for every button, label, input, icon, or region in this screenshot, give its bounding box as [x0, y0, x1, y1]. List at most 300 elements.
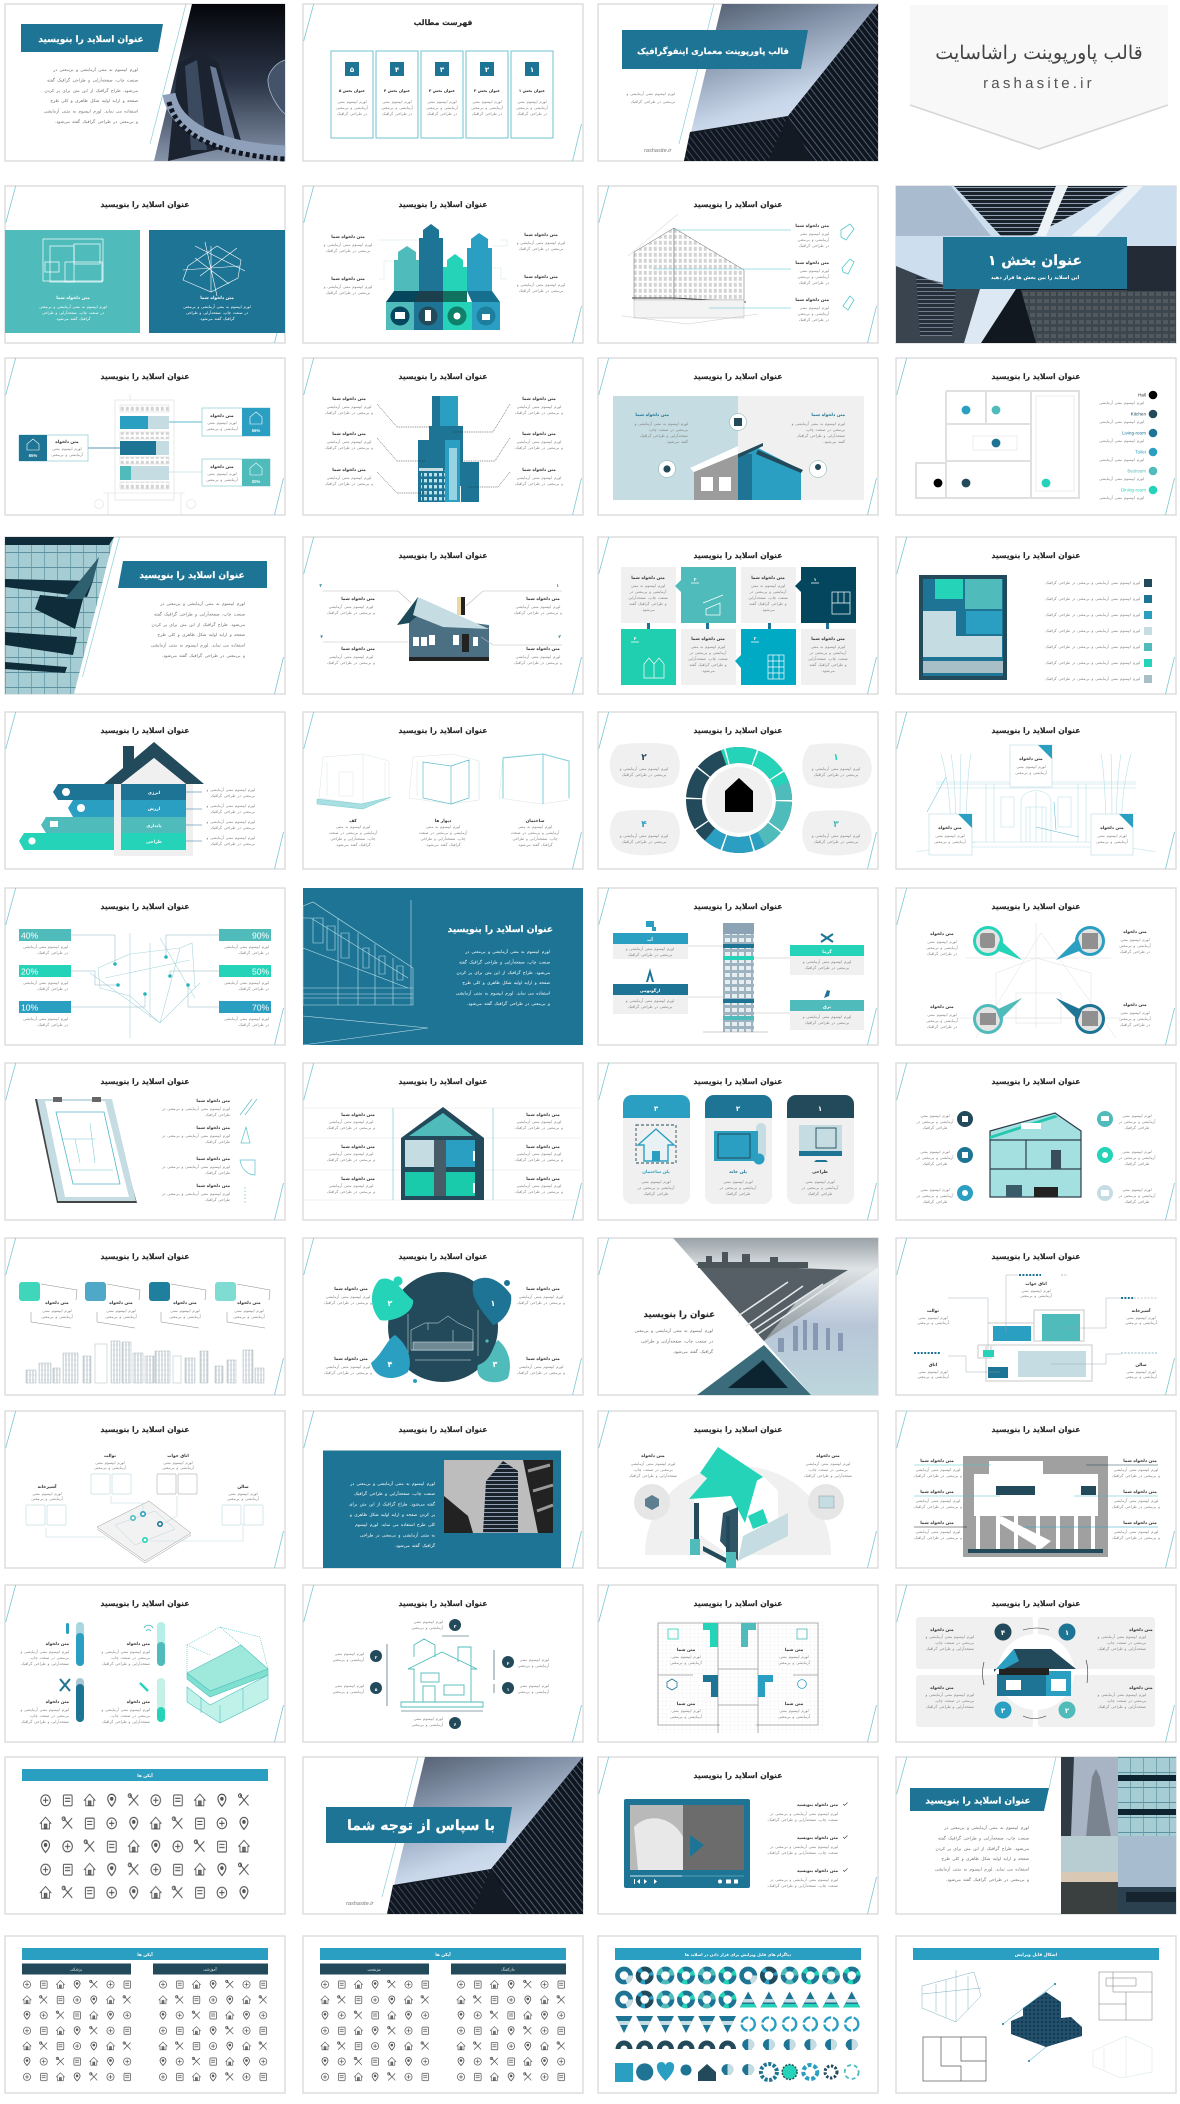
callout texts: متن دلخواه شما: [795, 297, 829, 303]
coloured doors: [703, 1623, 773, 1697]
side icons: [957, 1111, 1113, 1201]
callouts: بی‌معنی در طراحی گرافیک: [326, 290, 370, 295]
card 2: پلن خانه: [729, 1169, 747, 1175]
body text: لورم ایپسوم به متنی آزمایشی و بی‌معنی: [635, 1327, 713, 1334]
labels: متن دلخواه شما: [1123, 1520, 1157, 1526]
labels: اتاق خواب: [167, 1453, 189, 1459]
labels: در طراحی گرافیک: [1120, 1022, 1150, 1027]
labels: آزمایشی و بی‌معنی: [926, 1018, 959, 1023]
house shape: [104, 742, 204, 856]
title: عنوان اسلاید را بنویسید: [694, 1771, 782, 1780]
labels: صفحه‌آرایی و طراحی گرافیک: [629, 1473, 677, 1478]
labels: لورم ایپسوم متنی آزمایشی: [916, 1529, 960, 1534]
title: عنوان اسلاید را بنویسید: [101, 1425, 189, 1434]
callout texts: آزمایشی و بی‌معنی: [797, 274, 830, 279]
icons bar: آیکن ها: [435, 1951, 451, 1958]
labels: و بی‌معنی در طراحی گرافیک: [1112, 1473, 1160, 1478]
blue panel: [323, 1450, 561, 1568]
body text: و بی‌معنی در طراحی گرافیک گفته می‌شود.: [946, 1877, 1029, 1883]
subtitle: لورم ایپسوم متنی آزمایشی و: [626, 91, 675, 96]
leader lines: [323, 591, 562, 645]
title: عنوان اسلاید را بنویسید: [399, 1599, 487, 1608]
cover title banner: قالب پاورپوینت معماری اینفوگرافیک: [637, 46, 789, 57]
blobs: [371, 1276, 511, 1383]
card labels: متن دلخواه: [45, 1300, 69, 1306]
labels: لورم ایپسوم متنی: [32, 1491, 62, 1496]
slide: classical facade: [896, 712, 1176, 869]
contents labels: ۳: [440, 66, 445, 74]
labels: [914, 1458, 1160, 1540]
title: عنوان اسلاید را بنویسید: [694, 372, 782, 381]
title: عنوان اسلاید را بنویسید: [992, 1425, 1080, 1434]
card texts: و طراحی گرافیک گفته: [749, 601, 787, 606]
slide: isometric map: [5, 1411, 285, 1568]
center: [706, 767, 772, 833]
title: عنوان اسلاید را بنویسید: [992, 902, 1080, 911]
slide: cover: [598, 4, 878, 161]
number circles: ۱: [1065, 1629, 1069, 1637]
legend text: لورم ایپسوم متنی آزمایشی و بی‌معنی در طراحی گرافیک: [1045, 580, 1140, 585]
title: عنوان را بنویسید: [644, 1310, 715, 1320]
labels: لورم ایپسوم متنی: [228, 1491, 258, 1496]
labels: و بی‌معنی در طراحی گرافیک: [325, 410, 373, 415]
contents labels: ۱: [530, 66, 534, 74]
callout texts: در طراحی گرافیک: [799, 243, 829, 248]
legend: لورم ایپسوم متنی آزمایشی: [1099, 457, 1144, 462]
list items: متن دلخواه بنویسید: [797, 1868, 838, 1874]
wireframe: [90, 933, 200, 1038]
blob texts: ۱: [833, 753, 839, 763]
card 2: آزمایشی و بی‌معنی: [934, 839, 967, 844]
slide: cutaway house: [896, 1063, 1176, 1220]
labels: لورم ایپسوم متنی آزمایشی: [1114, 1467, 1158, 1472]
labels: [629, 1453, 852, 1478]
blob numbers: ۲: [388, 1299, 393, 1308]
side labels: لورم ایپسوم متنی آزمایشی: [517, 1183, 561, 1188]
slide: building percentages: [5, 358, 285, 515]
callout texts: آزمایشی و بی‌معنی: [797, 237, 830, 242]
card 1: متن دلخواه: [1019, 756, 1043, 762]
photo: sky and glass building: [387, 1757, 583, 1914]
card 2: [929, 814, 972, 855]
title: عنوان اسلاید را بنویسید: [992, 372, 1080, 381]
card labels: متن دلخواه: [173, 1300, 197, 1306]
labels: و بی‌معنی در طراحی گرافیک: [517, 1370, 565, 1375]
labels: لورم ایپسوم متنی آزمایشی: [516, 654, 560, 659]
section house: [401, 1107, 484, 1200]
right stat bars: لورم ایپسوم متنی آزمایشی: [224, 1016, 269, 1021]
photo: skyline and sea: [764, 1268, 878, 1395]
blob texts: ۳: [833, 820, 839, 830]
contents labels: عنوان بخش ۳: [429, 88, 455, 93]
icon grid right: [155, 1977, 272, 2085]
title: عنوان اسلاید را بنویسید: [694, 200, 782, 209]
side labels: و بی‌معنی در طراحی گرافیک: [327, 1125, 375, 1130]
tower illustration: [418, 396, 479, 502]
stat box 20%: 20%: [252, 479, 260, 484]
left stat bars: در طراحی گرافیک.: [37, 1022, 68, 1027]
labels: لورم ایپسوم متنی آزمایشی: [326, 1364, 370, 1369]
labels: سالن: [1135, 1362, 1147, 1368]
labels: متن دلخواه شما: [522, 431, 556, 437]
labels: [31, 1453, 260, 1501]
blob texts: لورم ایپسوم متنی آزمایشی و: [811, 833, 860, 838]
layer descriptions: [206, 787, 255, 846]
cutaway: [990, 1113, 1081, 1197]
card 3: لورم ایپسوم متنی: [641, 1179, 671, 1184]
labels: متن دلخواه شما: [332, 431, 366, 437]
stat box 20%: متن دلخواه: [210, 464, 234, 470]
labels: آزمایشی و بی‌معنی: [31, 1496, 64, 1501]
contents labels: لورم ایپسوم متنی: [472, 99, 502, 104]
items: [161, 1098, 230, 1202]
card 3: متن دلخواه: [1100, 825, 1124, 831]
callouts: لورم ایپسوم متنی آزمایشی و: [516, 282, 565, 287]
labels: لورم ایپسوم به متنی: [426, 824, 460, 829]
material circles: [974, 928, 1104, 1032]
building bars: [120, 416, 169, 480]
legend: Living-room: [1122, 430, 1146, 436]
labels: در طراحی گرافیک: [927, 1024, 957, 1029]
card 3: [1091, 814, 1133, 855]
slide: diagrams: [598, 1936, 878, 2093]
card labels: آزمایشی و بی‌معنی: [169, 1314, 202, 1319]
labels: متن دلخواه شما: [522, 467, 556, 473]
room labels: متن شما: [677, 1701, 696, 1707]
card texts: آزمایشی و بی‌معنی در: [629, 589, 667, 594]
labels: گرافیک گفته می‌شود.: [335, 842, 371, 847]
left stat bars: در طراحی گرافیک.: [37, 950, 68, 955]
step circles: [370, 1619, 514, 1729]
card 3: آزمایشی و بی‌معنی در: [637, 1185, 675, 1190]
contents labels: لورم ایپسوم متنی: [427, 99, 457, 104]
wire box: frame: [499, 754, 569, 804]
list items: [767, 1802, 838, 1888]
photo: teal glass facade: [5, 537, 114, 694]
labels: آزمایشی و بی‌معنی در صنعت: [329, 830, 378, 835]
slide: glass photo with text: [5, 537, 285, 694]
card 2: ۲: [736, 1105, 741, 1113]
legend: لورم ایپسوم متنی آزمایشی: [1099, 476, 1144, 481]
contents labels: ۲: [485, 66, 490, 74]
body text: [456, 948, 550, 1007]
right text: گفته می‌شود.: [823, 439, 845, 444]
tower chart: [386, 224, 500, 330]
left stat bars: 20%: [21, 966, 39, 976]
labels: توالت: [927, 1308, 939, 1314]
layer panel: انرژی: [148, 790, 161, 796]
card texts: و طراحی گرافیک گفته: [629, 601, 667, 606]
body text: استفاده می نماید. لورم ایپسوم به متنی آزمایشی: [935, 1866, 1029, 1872]
labels: و بی‌معنی در طراحی گرافیک: [324, 1370, 372, 1375]
panel: teal floorplan: در صنعت چاپ، صفحه‌آرایی و طراحی: [42, 310, 104, 315]
labels: صفحه‌آرایی و طراحی گرافیک: [804, 1473, 852, 1478]
tool icons: [841, 224, 854, 310]
labels: آزمایشی و بی‌معنی: [1125, 1320, 1158, 1325]
side labels: متن دلخواه شما: [526, 1112, 560, 1118]
card water: بی‌معنی در طراحی گرافیک: [628, 952, 672, 957]
body text: [935, 1824, 1029, 1883]
thanks banner: با سپاس از توجه شما: [347, 1818, 495, 1834]
labels: لورم ایپسوم متنی آزمایشی: [329, 654, 373, 659]
labels: متن دلخواه شما: [332, 467, 366, 473]
gray cards: [621, 567, 856, 685]
callouts: بی‌معنی در طراحی گرافیک: [519, 288, 563, 293]
body text: گرافیک گفته می‌شود.: [395, 1543, 436, 1549]
panel: teal floorplan: [5, 230, 140, 333]
body text: لورم ایپسوم به متنی آزمایشی و بی‌معنی در: [349, 1480, 435, 1487]
card heat: لورم ایپسوم متنی آزمایشی و: [802, 959, 851, 964]
labels: متن دلخواه شما: [1123, 1458, 1157, 1464]
contents labels: در طراحی گرافیک: [427, 111, 457, 116]
labels: لورم ایپسوم متنی: [918, 1315, 948, 1320]
labels: لورم ایپسوم متنی آزمایشی: [517, 475, 561, 480]
contents labels: لورم ایپسوم متنی: [382, 99, 412, 104]
slide: blueprint tablet: [5, 1063, 285, 1220]
callouts: [323, 232, 565, 295]
side labels: متن دلخواه شما: [341, 1112, 375, 1118]
legend: لورم ایپسوم متنی آزمایشی: [1099, 400, 1144, 405]
left stat bars: در طراحی گرافیک.: [37, 986, 68, 991]
legend text: لورم ایپسوم متنی آزمایشی و بی‌معنی در طراحی گرافیک: [1045, 596, 1140, 601]
body text: استفاده می نماید. لورم ایپسوم به متنی آزمایشی: [44, 108, 138, 114]
labels: متن دلخواه: [1123, 929, 1147, 935]
plan walls: [978, 1310, 1092, 1381]
title: عنوان اسلاید را بنویسید: [992, 726, 1080, 735]
contents labels: آزمایشی و بی‌معنی: [336, 105, 369, 110]
slide: business and marketing icons: [303, 1936, 583, 2093]
title: عنوان اسلاید را بنویسید: [399, 1077, 487, 1086]
blob texts: [619, 753, 860, 844]
labels: و بی‌معنی در طراحی گرافیک: [514, 660, 562, 665]
card 1: لورم ایپسوم متنی: [1016, 764, 1046, 769]
side texts: [916, 1113, 1156, 1204]
card texts: آزمایشی و بی‌معنی در: [749, 589, 787, 594]
body text: صفحه و ارایه اولیه شکل ظاهری و کلی طرح: [941, 1856, 1029, 1862]
number squares: [345, 62, 539, 76]
floorplan a: [923, 2037, 986, 2081]
labels: و بی‌معنی در طراحی گرافیک: [324, 1300, 372, 1305]
side labels: لورم ایپسوم متنی آزمایشی: [329, 1151, 373, 1156]
labels: لورم ایپسوم متنی آزمایشی: [327, 404, 371, 409]
labels: و بی‌معنی در طراحی گرافیک: [914, 1473, 962, 1478]
gauge labels: [20, 1641, 150, 1724]
labels: متن دلخواه شما: [920, 1489, 954, 1495]
section banner: عنوان بخش ۱: [988, 253, 1082, 269]
left text: صفحه‌آرایی و طراحی گرافیک: [640, 433, 688, 438]
card labels: لورم ایپسوم متنی: [42, 1308, 72, 1313]
card texts: صنعت چاپ، صفحه‌آرایی: [628, 595, 668, 600]
gauge labels: لورم ایپسوم متنی آزمایشی و: [100, 1649, 150, 1654]
right stat bars: 50%: [252, 966, 270, 976]
feature circles: [658, 414, 826, 478]
side texts: طراحی گرافیک: [923, 1125, 947, 1130]
card power: بی‌معنی در طراحی گرافیک: [805, 1020, 849, 1025]
slide: coloured plan: [896, 537, 1176, 694]
labels: لورم ایپسوم متنی آزمایشی: [517, 404, 561, 409]
legend text: [1045, 580, 1140, 681]
card water: [613, 921, 688, 959]
layer descriptions: بی‌معنی در طراحی گرافیک: [211, 841, 255, 846]
room labels: [670, 1647, 811, 1719]
dotted leaders: [377, 404, 510, 493]
layer panel: پایداری: [146, 823, 162, 829]
labels: متن دلخواه شما: [526, 1356, 560, 1362]
card 1: لورم ایپسوم متنی: [805, 1179, 835, 1184]
title banner: عنوان اسلاید را بنویسید: [38, 35, 144, 45]
contents labels: آزمایشی و بی‌معنی: [381, 105, 414, 110]
card numbers: [634, 578, 816, 642]
title: عنوان اسلاید را بنویسید: [992, 1599, 1080, 1608]
left stat bars: لورم ایپسوم متنی آزمایشی: [23, 944, 68, 949]
house: [397, 597, 489, 661]
labels: [324, 1286, 565, 1375]
legend swatches: [1144, 579, 1152, 683]
side labels: و بی‌معنی در طراحی گرافیک: [515, 1157, 563, 1162]
stat box 65%: آزمایشی و بی‌معنی: [51, 452, 84, 457]
right text: صفحه‌آرایی و طراحی گرافیک: [797, 433, 845, 438]
card 2: لورم ایپسوم متنی: [935, 833, 965, 838]
material swatches: [980, 933, 1098, 1026]
step texts: لورم ایپسوم متنی: [414, 1619, 443, 1624]
blob numbers: ۳: [493, 1360, 498, 1369]
blob texts: بی‌معنی در طراحی گرافیک: [814, 772, 858, 777]
left stat bars: لورم ایپسوم متنی آزمایشی: [23, 1016, 68, 1021]
room labels: متن شما: [677, 1647, 696, 1653]
labels: متن دلخواه شما: [526, 596, 560, 602]
connector lines: [71, 935, 219, 1007]
labels: متن دلخواه شما: [332, 396, 366, 402]
side labels: و بی‌معنی در طراحی گرافیک: [327, 1189, 375, 1194]
body text: صنعت چاپ، صفحه‌آرایی و طراحی گرافیک گفته: [154, 610, 245, 618]
slide: material callouts: [896, 888, 1176, 1045]
map markers: [131, 1512, 162, 1542]
rule lines: [303, 1108, 583, 1200]
items: متن دلخواه شما: [196, 1156, 230, 1162]
card 1: آزمایشی و بی‌معنی: [1015, 770, 1048, 775]
labels: و بی‌معنی در طراحی گرافیک: [515, 481, 563, 486]
legend: Toilet: [1135, 450, 1147, 454]
panel texts: صفحه‌آرایی و طراحی گرافیک: [926, 1704, 974, 1709]
step numbers: ۴: [507, 1662, 510, 1667]
step texts: لورم ایپسوم متنی: [520, 1657, 549, 1662]
subtitle: [626, 91, 675, 104]
panel texts: متن دلخواه: [1129, 1627, 1153, 1633]
body text: گفته می‌شود. طراح گرافیک از این متن برای: [349, 1502, 436, 1508]
check marks: [843, 1802, 848, 1872]
card texts: آزمایشی و بی‌معنی در: [809, 650, 847, 655]
labels: متن دلخواه شما: [341, 596, 375, 602]
items: طراحی گرافیک: [205, 1170, 230, 1175]
items: طراحی گرافیک: [205, 1139, 230, 1144]
card heat: [790, 934, 864, 975]
slide: house section: [303, 1063, 583, 1220]
blob texts: بی‌معنی در طراحی گرافیک: [622, 839, 666, 844]
card texts: متن دلخواه شما: [811, 636, 845, 642]
panel texts: صفحه‌آرایی و طراحی گرافیک: [926, 1646, 974, 1651]
thanks banner: [326, 1807, 512, 1843]
slide: ring cycle: [598, 712, 878, 869]
labels: و بی‌معنی در طراحی گرافیک: [514, 610, 562, 615]
leaders: [948, 1275, 1121, 1372]
cycle arrows: [982, 1628, 1088, 1718]
labels: آزمایشی و بی‌معنی: [94, 1465, 127, 1470]
labels: لورم ایپسوم به متنی: [336, 824, 370, 829]
body text: صفحه و ارایه اولیه شکل ظاهری و کلی طرح: [157, 632, 245, 638]
title: عنوان اسلاید را بنویسید: [101, 902, 189, 911]
panel: blue wireframe: لورم ایپسوم به متنی آزمایشی و بی‌معنی: [183, 304, 251, 309]
slide: grid floor plan: [598, 1585, 878, 1742]
step numbers: ۶: [454, 1723, 457, 1728]
card texts: لورم ایپسوم به متنی: [811, 644, 845, 649]
contents labels: عنوان بخش ۱: [519, 88, 545, 93]
photo: glass corner: [697, 1345, 811, 1395]
gauge labels: بی‌معنی در صنعت چاپ،: [29, 1713, 69, 1718]
card labels: لورم ایپسوم متنی: [170, 1308, 200, 1313]
step texts: آزمایشی و بی‌معنی: [411, 1722, 444, 1727]
room labels: آزمایشی و بی‌معنی: [670, 1660, 703, 1665]
labels: لورم ایپسوم متنی: [1126, 1369, 1156, 1374]
body text: صنعت چاپ، صفحه‌آرایی و طراحی گرافیک گفته: [459, 958, 550, 966]
items: لورم ایپسوم متنی آزمایشی و بی‌معنی در: [161, 1106, 230, 1111]
line house: [401, 1639, 483, 1707]
card 2: لورم ایپسوم متنی: [723, 1179, 753, 1184]
slide: slate house: [303, 537, 583, 694]
card 1: طراحی: [812, 1169, 828, 1175]
card texts: لورم ایپسوم به متنی: [691, 644, 725, 649]
right stat bars: [219, 929, 271, 1027]
card numbers: ۳: [694, 578, 697, 583]
card texts: [628, 575, 848, 673]
labels: آزمایشی و بی‌معنی: [1020, 1293, 1053, 1298]
labels: آزمایشی و بی‌معنی: [926, 945, 959, 950]
panel texts: لورم ایپسوم متنی آزمایشی و: [924, 1692, 974, 1697]
labels: و بی‌معنی در طراحی گرافیک: [1112, 1504, 1160, 1509]
side labels: متن دلخواه شما: [341, 1144, 375, 1150]
labels: لورم ایپسوم متنی: [163, 1460, 193, 1465]
panels: [613, 396, 864, 500]
title: عنوان اسلاید را بنویسید: [101, 372, 189, 381]
side texts: آزمایشی و بی‌معنی در: [1118, 1119, 1156, 1124]
sketch: [956, 923, 1121, 1038]
house: [690, 443, 803, 500]
city skyline: [26, 1341, 264, 1383]
side texts: طراحی گرافیک: [923, 1161, 947, 1166]
body text: پر کردن صفحه و ارایه اولیه شکل ظاهری و: [349, 1512, 436, 1518]
marker dots: [113, 955, 190, 996]
labels: لورم ایپسوم متنی آزمایشی: [631, 1461, 675, 1466]
gauge labels: متن دلخواه: [46, 1699, 69, 1705]
card labels: لورم ایپسوم متنی: [234, 1308, 264, 1313]
house: [994, 1649, 1076, 1696]
side labels: لورم ایپسوم متنی آزمایشی: [517, 1119, 561, 1124]
card texts: می‌شود.: [821, 668, 835, 673]
body text: گرافیک گفته می‌شود.: [673, 1349, 714, 1355]
card numbers: ۲: [754, 637, 757, 642]
card power: [790, 990, 864, 1030]
labels: ساختمان: [526, 818, 544, 824]
blob texts: لورم ایپسوم متنی آزمایشی و: [619, 766, 668, 771]
callouts: بی‌معنی در طراحی گرافیک: [519, 246, 563, 251]
stat box 20%: آزمایشی و بی‌معنی: [206, 477, 239, 482]
icon squares: [19, 1282, 236, 1301]
step texts: آزمایشی و بی‌معنی: [332, 1689, 365, 1694]
labels: ۴: [320, 635, 323, 640]
card numbers: ۴: [634, 637, 637, 642]
step numbers: ۳: [454, 1625, 457, 1630]
left text: متن دلخواه شما: [635, 412, 669, 418]
category bars: بیزینسی: [367, 1966, 381, 1972]
